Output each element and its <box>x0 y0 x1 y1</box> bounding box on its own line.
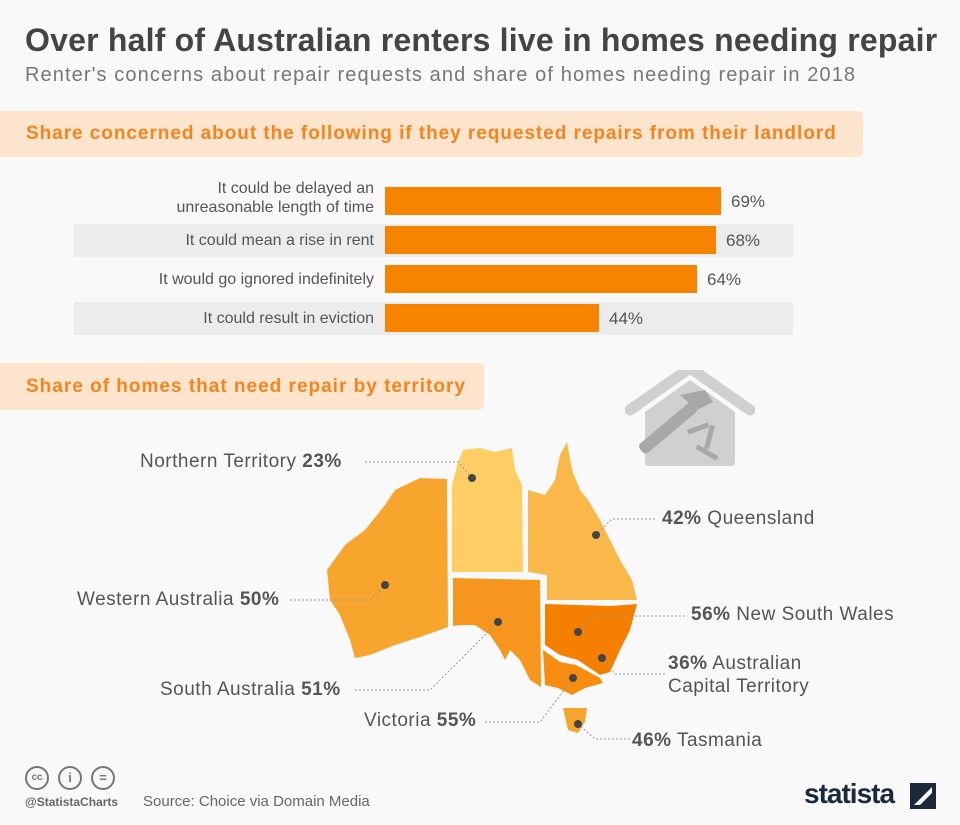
footer handle: @StatistaCharts <box>25 795 118 809</box>
bar chart: concerns <box>74 180 793 335</box>
header: territory: Share of homes that need repair by territory <box>26 376 466 397</box>
map labels: 46% Tasmania <box>632 730 762 751</box>
region: VIC <box>543 650 603 695</box>
map labels: Victoria 55% <box>364 710 476 731</box>
row 2: It could mean a rise in rent <box>185 232 374 249</box>
region: SA <box>453 578 541 687</box>
map labels: South Australia 51% <box>160 679 341 700</box>
title: Over half of Australian renters live in homes needing repair <box>25 22 937 58</box>
row 3 <box>159 265 741 293</box>
icon: cc license <box>25 766 115 790</box>
leader lines <box>290 462 685 739</box>
header: territory <box>0 363 484 410</box>
row 4 <box>74 302 793 335</box>
region: WA <box>327 478 448 658</box>
header: concerns <box>0 111 863 157</box>
row 1: unreasonable length of time <box>177 199 374 216</box>
region: QLD <box>528 442 637 600</box>
row 1: 69% <box>731 192 765 211</box>
map labels: Western Australia 50% <box>77 589 279 610</box>
region: NSW <box>545 604 637 675</box>
icon: cc license: = <box>99 770 107 785</box>
icon: cc license: i <box>68 770 72 785</box>
icon: cc license: cc <box>31 772 43 783</box>
map labels: Capital Territory <box>668 676 809 697</box>
row 4: 44% <box>609 309 643 328</box>
row 3: It would go ignored indefinitely <box>159 271 374 288</box>
row 2: 68% <box>726 231 760 250</box>
row 1 <box>177 180 765 216</box>
logo: statista <box>804 778 936 809</box>
icon: house with tools <box>625 370 755 466</box>
region: TAS <box>563 708 587 733</box>
row 2 <box>74 224 793 257</box>
row 3: 64% <box>707 270 741 289</box>
map labels: 42% Queensland <box>662 508 815 529</box>
row 4: It could result in eviction <box>203 310 374 327</box>
logo: statista: statista <box>804 778 894 809</box>
map labels: Northern Territory 23% <box>140 451 342 472</box>
region: NT <box>452 448 523 572</box>
map labels: 36% Australian <box>668 653 802 674</box>
header: concerns: Share concerned about the following if they requested repairs from their landlord <box>26 123 837 144</box>
source: Source: Choice via Domain Media <box>143 793 370 810</box>
map labels: 56% New South Wales <box>691 604 894 625</box>
row 1: It could be delayed an <box>217 180 374 197</box>
subtitle: Renter's concerns about repair requests and share of homes needing repair in 2018 <box>25 64 856 86</box>
